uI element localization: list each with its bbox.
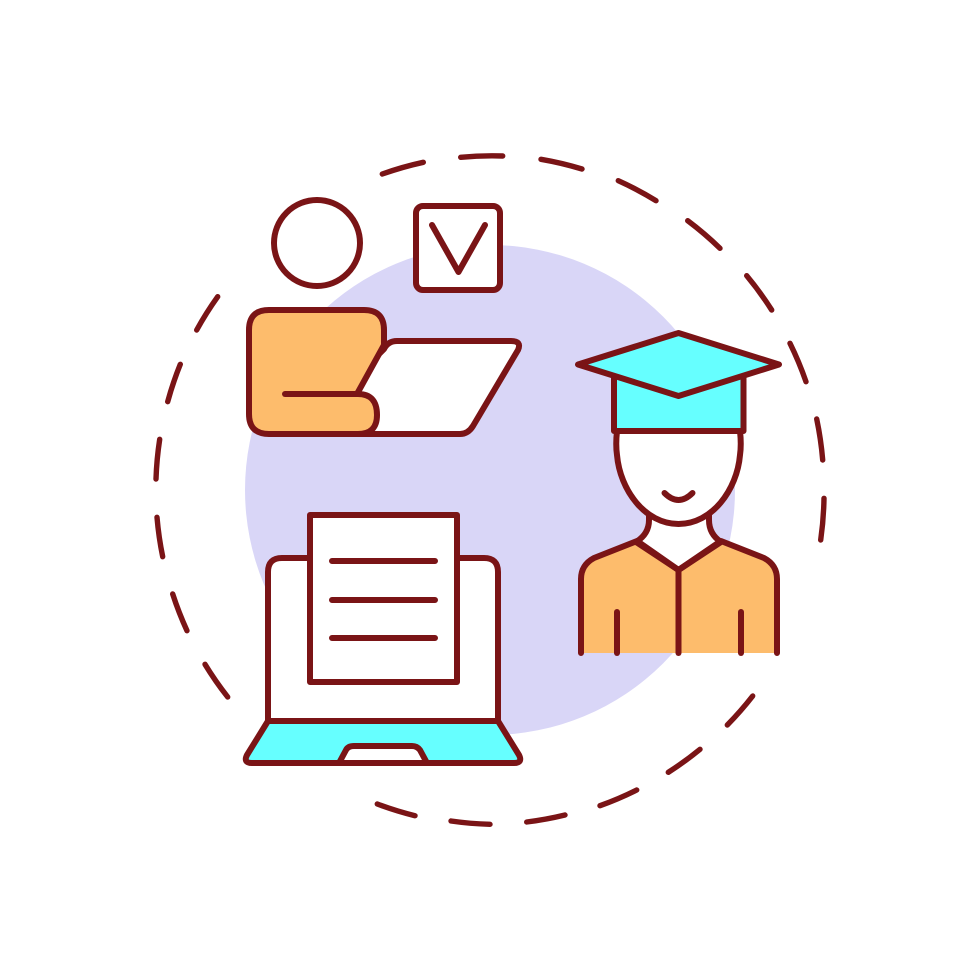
face [616, 431, 741, 524]
background circle [245, 245, 735, 735]
cap base [614, 375, 744, 431]
mortarboard [578, 333, 779, 396]
base [246, 721, 520, 763]
dashed ring [156, 156, 824, 824]
screen [268, 558, 498, 721]
open laptop screen [300, 341, 519, 434]
head [274, 200, 360, 286]
neck [636, 512, 721, 570]
laptop with document [246, 515, 520, 763]
smile [664, 493, 692, 500]
trackpad notch [339, 746, 427, 763]
gown lines [676, 570, 682, 653]
document [310, 515, 457, 682]
checkmark box [416, 206, 500, 290]
arm line [285, 391, 358, 397]
torso [249, 310, 384, 434]
gown fill [581, 541, 777, 653]
person at laptop [249, 200, 519, 434]
graduate [578, 333, 779, 653]
gown outline [581, 541, 777, 653]
check mark [432, 225, 485, 272]
document lines [332, 561, 435, 638]
